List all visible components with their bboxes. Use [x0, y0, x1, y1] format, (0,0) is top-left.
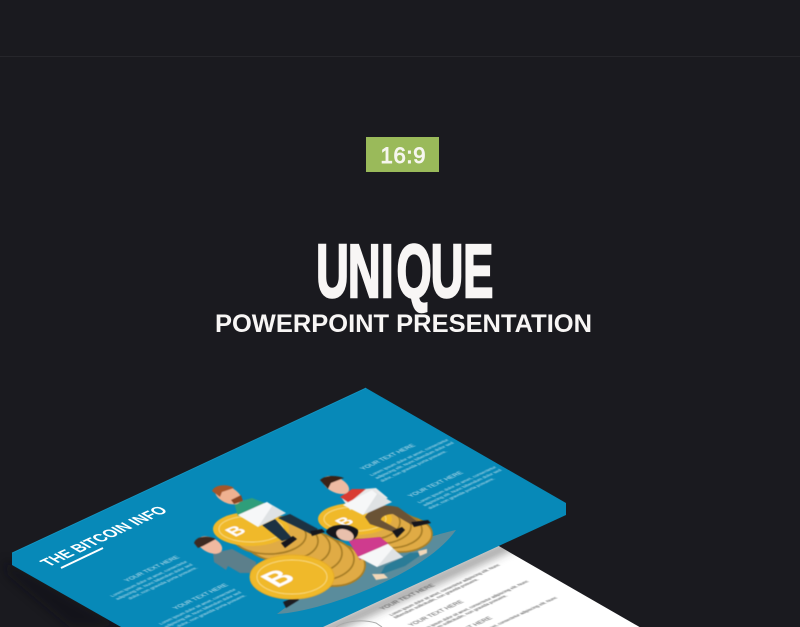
panel: white slide — [323, 546, 640, 627]
left text block 2: YOUR TEXT HERE — [173, 583, 230, 611]
right text block 1: YOUR TEXT HERE — [360, 444, 418, 471]
white slide text: Lorem ipsum dolor sit amet, consectetur adipiscing elit. Nunc — [388, 563, 502, 616]
badge: 16:9: 16:9 — [380, 143, 426, 168]
white slide text: YOUR TEXT HERE — [408, 600, 466, 627]
illustration: left coin stack — [213, 512, 365, 586]
right text block 1: dolor, non gravida porta posuere. — [379, 450, 449, 483]
heading: The Bitcoin Info: THE BITCOIN INFO — [36, 504, 172, 569]
right text block 2: YOUR TEXT HERE — [408, 471, 466, 499]
person: top right with red shirt — [320, 472, 431, 538]
left text block 2: Lorem ipsum dolor sit amet, consectetur — [158, 588, 238, 625]
person: bottom right with pink shirt — [326, 525, 427, 580]
badge: 16:9 — [366, 137, 439, 172]
right text block 2 — [407, 460, 509, 510]
white slide text: bibendum sollicitudin, non gravida posuere. — [392, 578, 480, 619]
left text block 1: Lorem ipsum dolor sit amet, consectetur — [109, 560, 189, 598]
subtitle: PowerPoint Presentation: POWERPOINT PRESENTATION — [215, 310, 592, 338]
right text block 2: adipiscing elit. Nunc bibendum dolor sed — [422, 468, 504, 507]
right text block 1 — [359, 433, 461, 483]
left text block 1 — [101, 555, 200, 604]
illustration: right coin stack — [318, 503, 432, 552]
left text block 1: adipiscing elit. Nunc bibendum dolor sed — [114, 563, 194, 601]
white slide text — [378, 558, 559, 627]
left text block 2 — [150, 583, 248, 627]
left text block 1: YOUR TEXT HERE — [124, 556, 182, 583]
illustration: right coin stack: B — [331, 514, 359, 529]
ground shadow — [277, 530, 456, 614]
icon: front bitcoin coin: B — [253, 565, 303, 591]
right text block 2: dolor, non gravida porta posuere. — [427, 477, 496, 510]
white slide text: YOUR TEXT HERE — [379, 584, 437, 611]
right text block 1: adipiscing elit. Nunc bibendum dolor sed — [374, 441, 456, 480]
person: top left with green shirt — [212, 482, 325, 548]
panel: blue slide — [12, 388, 566, 627]
text blocks on blue slide — [100, 433, 510, 627]
icon: front bitcoin coin — [250, 555, 334, 599]
person: left standing — [194, 533, 299, 608]
shadow under blue slide — [4, 560, 121, 627]
right text block 2: Lorem ipsum dolor sit amet, consectetur — [416, 465, 498, 504]
illustration: left coin stack: B — [221, 523, 252, 539]
right text block 1: Lorem ipsum dolor sit amet, consectetur — [368, 438, 450, 477]
title: UNIQUE: UNIQUE — [316, 230, 493, 314]
left text block 1: dolor, non gravida porta posuere. — [127, 566, 199, 600]
white slide diagram outline — [336, 621, 382, 627]
